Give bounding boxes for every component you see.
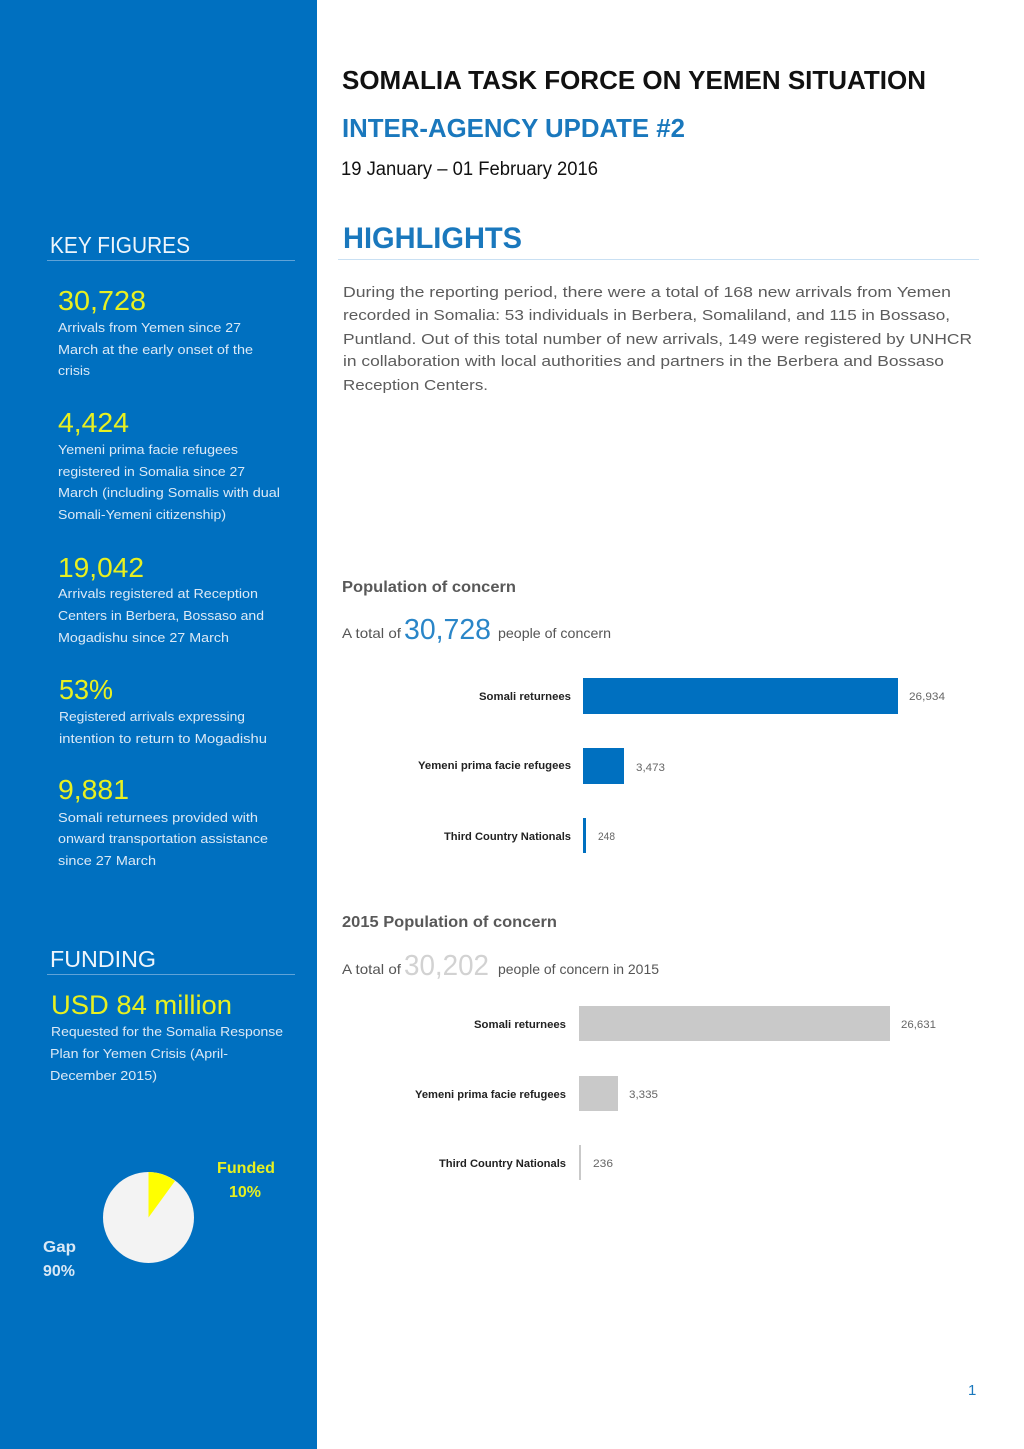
pie label: funded: Funded bbox=[217, 1160, 275, 1177]
heading: key figures: KEY FIGURES bbox=[50, 232, 190, 258]
funding amount and description: December 2015) bbox=[50, 1069, 157, 1083]
heading: population of concern: Population of concern bbox=[342, 579, 516, 596]
bar row: Third Country Nationals: Third Country Nationals bbox=[444, 831, 571, 843]
total: 30,202 people of concern in 2015: people of concern in 2015 bbox=[498, 961, 659, 977]
key figure: arrivals from Yemen: March at the early onset of the bbox=[58, 343, 253, 357]
bar row: Somali returnees: 26,934 bbox=[909, 691, 945, 703]
bar row 2015: Yemeni prima facie refugees bbox=[415, 1076, 658, 1111]
key figure: Yemeni refugees: Somali-Yemeni citizenship) bbox=[58, 508, 226, 522]
key figure: onward transportation bbox=[58, 774, 268, 868]
total: 30,728 people of concern bbox=[342, 614, 611, 646]
key figure: onward transportation: 9,881 bbox=[58, 774, 129, 805]
total: 30,202 people of concern in 2015: A total of bbox=[342, 961, 401, 977]
bar row 2015: Yemeni prima facie refugees: Yemeni prima facie refugees bbox=[415, 1089, 566, 1101]
total: 30,728 people of concern: A total of bbox=[342, 625, 401, 641]
key figure: arrivals registered: Arrivals registered at Reception bbox=[58, 587, 258, 601]
text block: highlights paragraph: Puntland. Out of this total number of new arrivals, 149 were registered by UNHCR bbox=[343, 332, 972, 348]
bar row 2015: Somali returnees: Somali returnees bbox=[474, 1019, 566, 1031]
bar row 2015: Third Country Nationals bbox=[439, 1145, 613, 1180]
text block: highlights paragraph: recorded in Somalia: 53 individuals in Berbera, Somaliland, and 115 in Bossaso, bbox=[343, 308, 950, 324]
bar row 2015: Somali returnees: 26,631 bbox=[901, 1019, 936, 1031]
heading: funding: FUNDING bbox=[50, 946, 156, 972]
bar chart: 2015 population of concern bbox=[415, 1006, 936, 1180]
key figure: Yemeni refugees: registered in Somalia since 27 bbox=[58, 465, 245, 479]
key figure: Yemeni refugees: 4,424 bbox=[58, 407, 129, 438]
key figure: intention to return: Registered arrivals expressing bbox=[59, 710, 245, 724]
key figure: intention to return: intention to return to Mogadishu bbox=[59, 732, 267, 746]
pie label: funded: 10% bbox=[229, 1184, 261, 1201]
pie label: funded bbox=[217, 1160, 275, 1201]
date: 19 January – 01 February 2016 bbox=[341, 159, 598, 180]
pie label: gap: Gap bbox=[43, 1239, 76, 1256]
key figure: arrivals registered: Centers in Berbera, Bossaso and bbox=[58, 609, 264, 623]
key figure: arrivals from Yemen: 30,728 bbox=[58, 285, 146, 316]
bar chart: population of concern bbox=[418, 678, 945, 853]
bar row 2015: Somali returnees bbox=[474, 1006, 936, 1041]
text block: highlights paragraph: Reception Centers. bbox=[343, 378, 488, 394]
bar row: Yemeni prima facie refugees: Yemeni prima facie refugees bbox=[418, 760, 571, 772]
bar row 2015: Third Country Nationals: Third Country Nationals bbox=[439, 1158, 566, 1170]
pie chart: funded vs gap bbox=[103, 1172, 194, 1263]
heading: 2015 population of concern: 2015 Population of concern bbox=[342, 914, 557, 931]
key figure: arrivals registered: Mogadishu since 27 March bbox=[58, 631, 229, 645]
key figure: intention to return bbox=[59, 674, 267, 746]
page number: 1 bbox=[968, 1382, 976, 1399]
bar row: Third Country Nationals bbox=[444, 818, 615, 853]
bar row 2015: Yemeni prima facie refugees: 3,335 bbox=[629, 1089, 658, 1101]
panel: blue sidebar bbox=[0, 0, 317, 1449]
key figure: onward transportation: onward transportation assistance bbox=[58, 832, 268, 846]
text block: highlights paragraph bbox=[343, 285, 972, 394]
funding amount and description: Requested for the Somalia Response bbox=[51, 1025, 283, 1039]
bar row: Somali returnees: Somali returnees bbox=[479, 691, 571, 703]
bar row: Yemeni prima facie refugees bbox=[418, 748, 665, 784]
bar row: Somali returnees bbox=[479, 678, 945, 714]
key figure: Yemeni refugees: March (including Somalis with dual bbox=[58, 486, 280, 500]
total: 30,728 people of concern: people of concern bbox=[498, 625, 611, 641]
key figure: onward transportation: since 27 March bbox=[58, 854, 156, 868]
subtitle: INTER-AGENCY UPDATE #2 bbox=[342, 113, 685, 143]
key figure: arrivals from Yemen bbox=[58, 285, 253, 378]
pie label: gap bbox=[43, 1239, 76, 1280]
funding amount and description bbox=[50, 990, 283, 1083]
total: 30,202 people of concern in 2015: 30,202 bbox=[404, 950, 489, 982]
key figure: Yemeni refugees: Yemeni prima facie refugees bbox=[58, 443, 238, 457]
key figure: intention to return: 53% bbox=[59, 674, 113, 705]
key figure: arrivals from Yemen: Arrivals from Yemen since 27 bbox=[58, 321, 241, 335]
total: 30,728 people of concern: 30,728 bbox=[404, 614, 491, 646]
pie label: gap: 90% bbox=[43, 1263, 75, 1280]
key figure: onward transportation: Somali returnees provided with bbox=[58, 811, 258, 825]
key figure: arrivals registered bbox=[58, 552, 264, 645]
funding amount and description: USD 84 million bbox=[51, 990, 232, 1020]
title: SOMALIA TASK FORCE ON YEMEN SITUATION bbox=[342, 65, 926, 95]
bar row: Yemeni prima facie refugees: 3,473 bbox=[636, 762, 665, 774]
text block: highlights paragraph: in collaboration with local authorities and partners in the Berbera and Bossaso bbox=[343, 354, 944, 370]
total: 30,202 people of concern in 2015 bbox=[342, 950, 659, 982]
key figure: arrivals registered: 19,042 bbox=[58, 552, 144, 583]
funding amount and description: Plan for Yemen Crisis (April- bbox=[50, 1047, 228, 1061]
heading: highlights: HIGHLIGHTS bbox=[343, 222, 522, 255]
key figure: Yemeni refugees bbox=[58, 407, 280, 522]
key figure: arrivals from Yemen: crisis bbox=[58, 364, 90, 378]
text block: highlights paragraph: During the reporting period, there were a total of 168 new arrivals from Yemen bbox=[343, 285, 951, 301]
bar row 2015: Third Country Nationals: 236 bbox=[593, 1158, 613, 1170]
bar row: Third Country Nationals: 248 bbox=[598, 831, 615, 843]
